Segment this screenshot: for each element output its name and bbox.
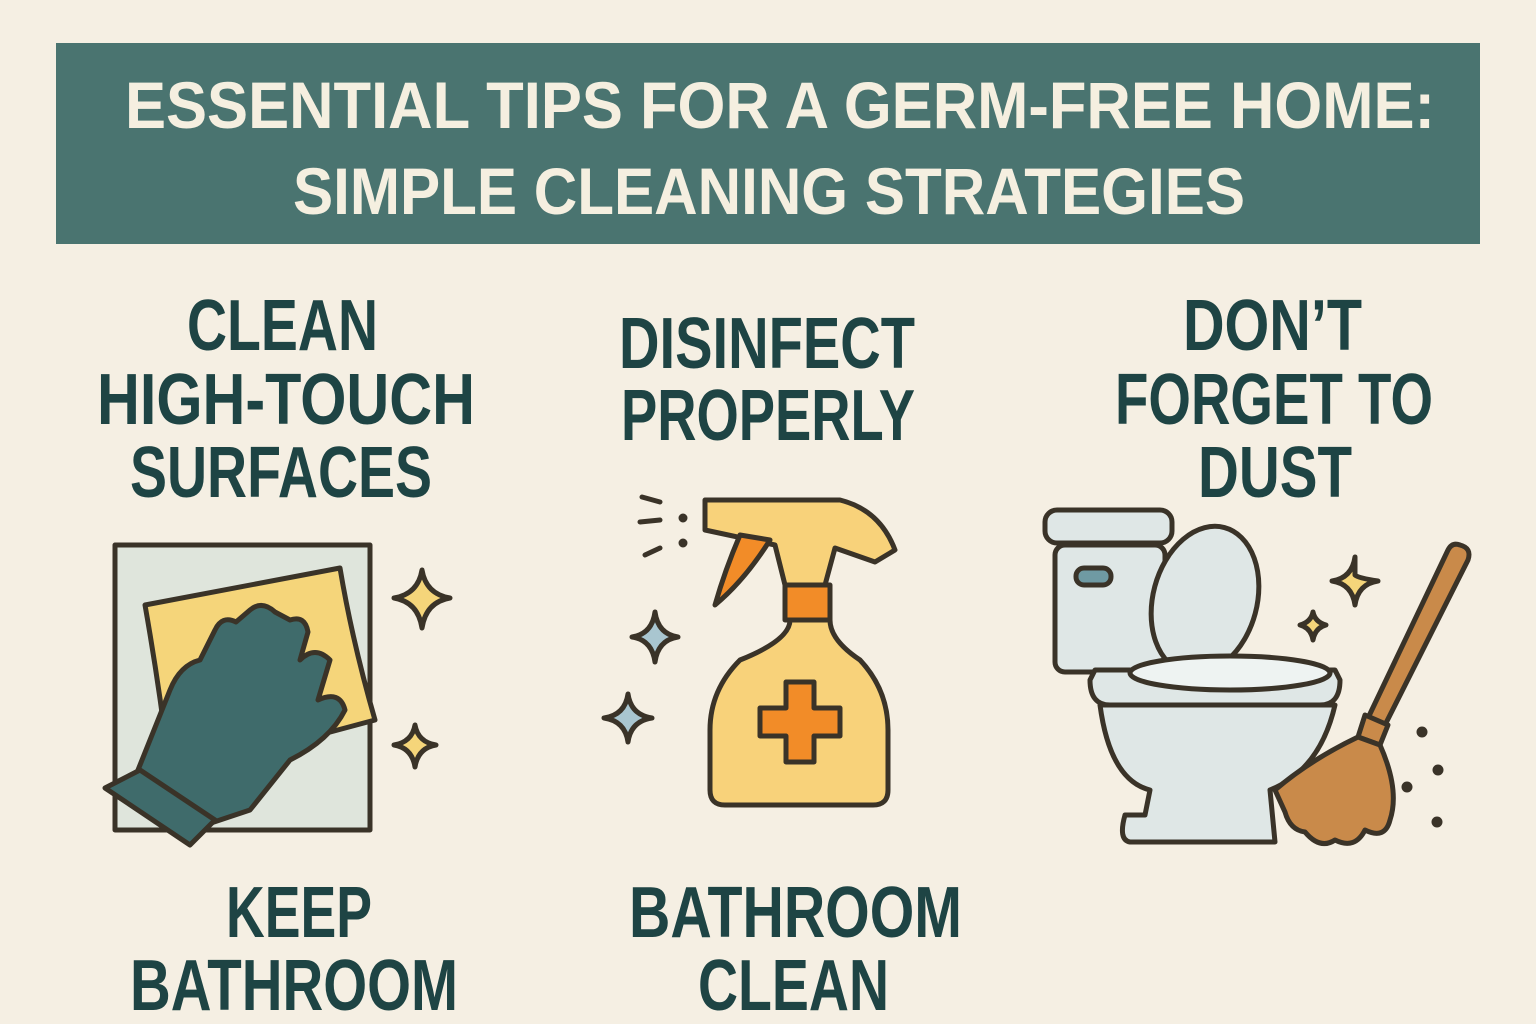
icon: spray bottle xyxy=(604,497,895,805)
heading: don't forget to dust: DUST xyxy=(1198,433,1352,513)
icon: gloved hand wiping surface xyxy=(105,545,450,845)
title banner: SIMPLE CLEANING STRATEGIES xyxy=(293,154,1245,228)
icon: toilet with duster xyxy=(1045,510,1469,844)
heading: disinfect properly xyxy=(619,304,915,456)
heading: clean high-touch surfaces: SURFACES xyxy=(130,433,432,513)
heading: bathroom clean: CLEAN xyxy=(698,946,889,1024)
heading: bathroom clean: BATHROOM xyxy=(629,873,962,953)
heading: clean high-touch surfaces: CLEAN xyxy=(187,286,378,366)
heading: don't forget to dust: DON’T xyxy=(1183,286,1362,366)
heading: don't forget to dust xyxy=(1115,286,1433,513)
heading: disinfect properly: PROPERLY xyxy=(621,376,915,456)
title banner: ESSENTIAL TIPS FOR A GERM-FREE HOME: xyxy=(125,68,1435,142)
title banner xyxy=(56,43,1480,244)
heading: don't forget to dust: FORGET TO xyxy=(1115,360,1433,440)
heading: keep bathroom: KEEP xyxy=(226,873,372,953)
heading: keep bathroom: BATHROOM xyxy=(130,946,458,1024)
heading: clean high-touch surfaces: HIGH-TOUCH xyxy=(97,360,475,440)
heading: disinfect properly: DISINFECT xyxy=(619,304,915,384)
heading: bathroom clean xyxy=(629,873,962,1024)
heading: clean high-touch surfaces xyxy=(97,286,475,513)
heading: keep bathroom xyxy=(130,873,458,1024)
